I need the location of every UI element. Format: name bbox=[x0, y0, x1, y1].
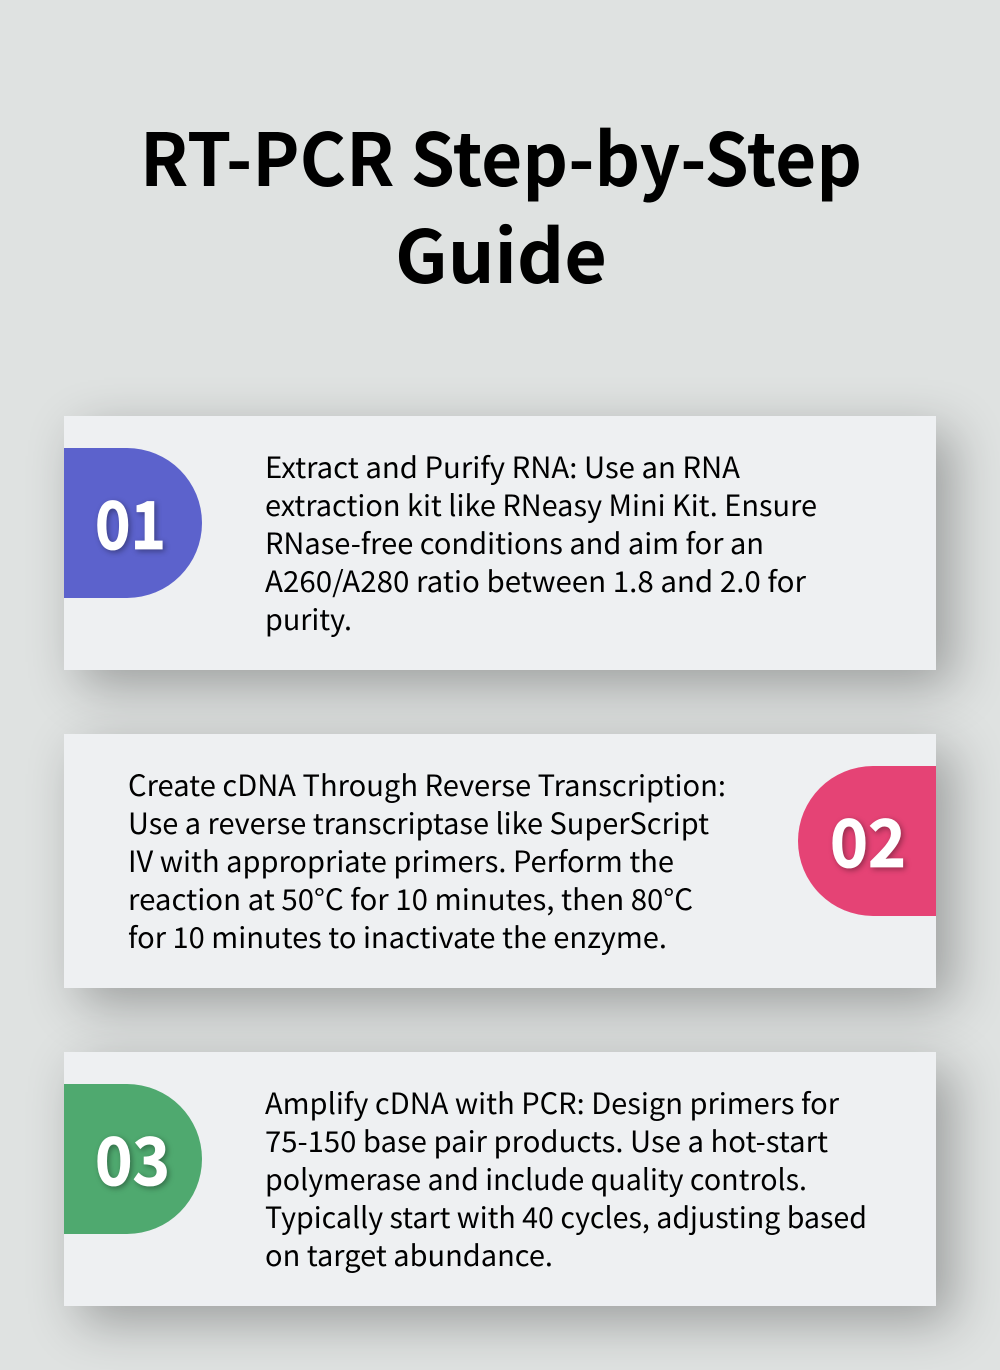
text: step 1 description: A260/A280 ratio between 1.8 and 2.0 for bbox=[265, 559, 807, 601]
text: step 3 description: Amplify cDNA with PCR: Design primers for bbox=[265, 1081, 840, 1123]
text: step 1 description: RNase-free conditions and aim for an bbox=[265, 521, 764, 563]
badge: 02: 02 bbox=[830, 791, 906, 887]
text: step 2 description: for 10 minutes to inactivate the enzyme. bbox=[128, 915, 667, 957]
text: step 1 description: Extract and Purify RNA: Use an RNA bbox=[265, 445, 740, 487]
text: step 3 description bbox=[265, 1081, 867, 1275]
text: step 1 description: purity. bbox=[265, 597, 352, 639]
text: step 3 description: Typically start with 40 cycles, adjusting based bbox=[265, 1195, 867, 1237]
text: step 2 description: reaction at 50°C for 10 minutes, then 80°C bbox=[128, 877, 693, 919]
panel: step 2 bbox=[64, 734, 936, 988]
text: step 2 description bbox=[128, 763, 726, 957]
title bbox=[140, 102, 862, 305]
panel: step 3 bbox=[64, 1052, 936, 1306]
text: step 2 description: Use a reverse transcriptase like SuperScript bbox=[128, 801, 709, 843]
text: step 3 description: 75-150 base pair products. Use a hot-start bbox=[265, 1119, 828, 1161]
panel: step 1 bbox=[64, 416, 936, 670]
text: step 1 description bbox=[265, 445, 817, 639]
text: step 2 description: IV with appropriate primers. Perform the bbox=[128, 839, 674, 881]
title: RT-PCR Step-by-Step bbox=[140, 102, 862, 208]
badge: 03: 03 bbox=[95, 1109, 170, 1205]
text: step 3 description: on target abundance. bbox=[265, 1233, 553, 1275]
text: step 1 description: extraction kit like RNeasy Mini Kit. Ensure bbox=[265, 483, 817, 525]
text: step 3 description: polymerase and include quality controls. bbox=[265, 1157, 807, 1199]
badge: 02 bbox=[798, 766, 936, 916]
text: step 2 description: Create cDNA Through Reverse Transcription: bbox=[128, 763, 726, 805]
badge: 01: 01 bbox=[95, 473, 166, 569]
badge: 03 bbox=[64, 1084, 202, 1234]
badge: 01 bbox=[64, 448, 202, 598]
title: Guide bbox=[395, 199, 607, 305]
